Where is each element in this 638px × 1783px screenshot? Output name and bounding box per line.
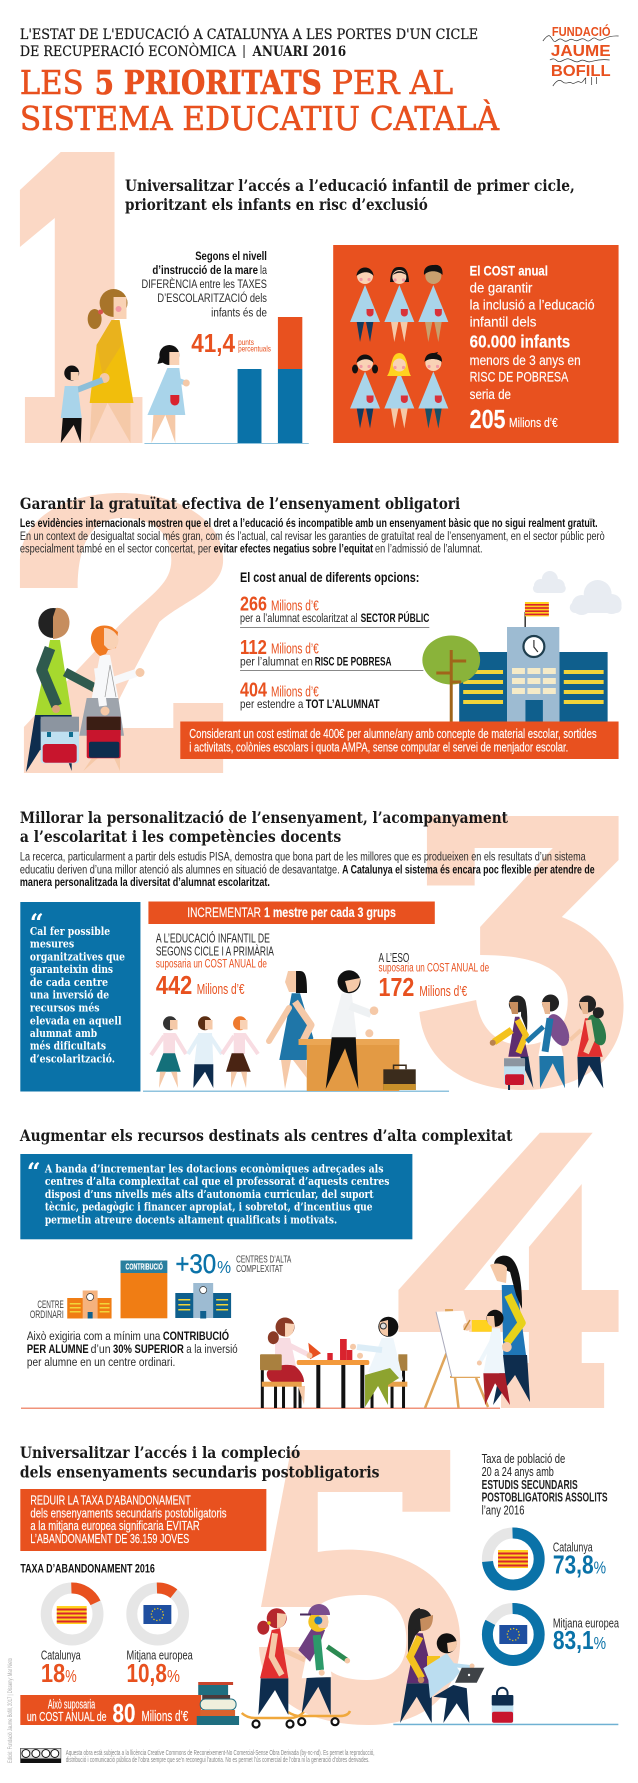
illustration: mother and children bbox=[61, 289, 190, 443]
banner: one teacher per three groups: 1 mestre per cada 3 grups bbox=[264, 904, 396, 920]
callout: 80 million cost: un COST ANUAL de bbox=[27, 1709, 107, 1724]
title: LES bbox=[20, 63, 84, 102]
girl on chair bbox=[260, 1318, 313, 1408]
text: population rate heading: Taxa de població de bbox=[482, 1451, 565, 1466]
heading: priority 3: Millorar la personalització de l’ensenyament, l’acompanyament bbox=[20, 808, 509, 827]
male teacher bbox=[326, 970, 378, 1089]
icon: red backpack bbox=[87, 717, 121, 758]
easel bbox=[425, 1309, 488, 1408]
teacher and child at easel bbox=[463, 1256, 530, 1405]
cost options list: 404 bbox=[240, 679, 267, 702]
cost options list bbox=[240, 569, 430, 711]
female teacher bbox=[269, 971, 313, 1089]
text: maternal education gap: infants és de bbox=[211, 305, 267, 320]
donut: Europe attainment 83.1%: 83,1 bbox=[553, 1627, 594, 1655]
panel: quote on resources: garanteixin dins bbox=[30, 962, 113, 976]
licence note: distribució i comunicació pública de l’obra sempre que se’n reconegui l’autoria. No es permet l’ús comercial de l’obra ni la generació d’obres derivades. bbox=[66, 1757, 370, 1764]
panel: cost of inclusion: seria de bbox=[470, 386, 511, 402]
heading: priority 5 bbox=[20, 1443, 380, 1482]
cost options list: per estendre a bbox=[240, 697, 304, 711]
text: priority 2 intro: evitar efectes negatius sobre l’equitat bbox=[214, 541, 373, 556]
callout: reduce dropout bbox=[20, 1489, 266, 1551]
panel: cost of inclusion: El COST anual bbox=[470, 262, 548, 279]
heading: priority 1: Universalitzar l’accés a l’educació infantil de primer cicle, bbox=[125, 176, 575, 195]
text: priority 3 intro: educatiu deriven d’una millor atenció als alumnes en situació de desavantatge. bbox=[20, 862, 340, 877]
icon: stack of books bbox=[197, 1682, 239, 1725]
cost options list: per a l’alumnat escolaritzat al bbox=[240, 611, 358, 625]
big number 3 bbox=[419, 816, 624, 1090]
stat: secondary: suposaria un COST ANUAL de bbox=[379, 960, 489, 975]
illustration: students with laptop bbox=[393, 1608, 618, 1725]
title: 5 PRIORITATS bbox=[95, 63, 322, 102]
panel: quote on resources bbox=[20, 902, 140, 1092]
text: maternal education gap: percentuals bbox=[238, 344, 271, 354]
stat: secondary: Milions d’€ bbox=[419, 983, 468, 1000]
banner: one teacher per three groups bbox=[148, 902, 435, 924]
stat: infant and primary: suposaria un COST ANUAL de bbox=[156, 956, 267, 971]
panel: cost of inclusion: 60.000 infants bbox=[470, 331, 570, 352]
title: PER AL bbox=[332, 63, 453, 102]
stat: infant and primary: A L’EDUCACIÓ INFANTIL DE bbox=[156, 930, 270, 946]
heading: priority 3 bbox=[20, 808, 509, 846]
desk bbox=[299, 1039, 399, 1091]
callout: reduce dropout: a la mitjana europea significaria EVITAR bbox=[30, 1518, 200, 1533]
text: priority 2 intro: en l’admissió de l’alumnat. bbox=[375, 541, 483, 556]
text: minimum contribution: Això exigiria com a mínim una bbox=[27, 1329, 161, 1343]
text: population rate heading: l’any 2016 bbox=[482, 1502, 524, 1518]
text: maternal education gap: D’ESCOLARITZACIÓ dels bbox=[157, 290, 267, 305]
text: minimum contribution: CONTRIBUCIÓ bbox=[163, 1328, 229, 1343]
cost options list: Milions d’€ bbox=[271, 597, 319, 615]
table and blocks bbox=[297, 1339, 369, 1408]
panel: cost of inclusion: infantil dels bbox=[470, 313, 536, 330]
callout: 80 million cost: Milions d’€ bbox=[141, 1708, 189, 1725]
logo: Fundació Jaume Bofill bbox=[543, 24, 619, 86]
big number 1 bbox=[20, 152, 142, 443]
panel: quote on resources: de cada centre bbox=[30, 975, 108, 989]
panel: quote on autonomy: permetin atreure docents altament qualificats i motivats. bbox=[45, 1212, 337, 1227]
title: SISTEMA EDUCATIU CATALÀ bbox=[20, 98, 500, 138]
illustration: parent and child with backpacks bbox=[26, 608, 145, 772]
donut: Europe attainment 83.1%: % bbox=[594, 1633, 606, 1653]
stat: secondary: 172 bbox=[379, 974, 414, 1002]
text: population rate heading: 20 a 24 anys amb bbox=[482, 1464, 554, 1479]
big number 2 bbox=[20, 493, 223, 773]
panel: cost of inclusion bbox=[333, 245, 619, 443]
callout: reduce dropout: REDUIR LA TAXA D’ABANDONAMENT bbox=[30, 1492, 191, 1508]
children in a row bbox=[151, 1016, 258, 1088]
panel: quote on resources: d’escolarització. bbox=[30, 1051, 115, 1066]
text: minimum contribution: a la inversió bbox=[186, 1342, 238, 1356]
panel: cost of inclusion: menors de 3 anys en bbox=[470, 352, 581, 368]
icons: six children bbox=[350, 265, 448, 428]
donut: Catalunya attainment 73.8%: % bbox=[594, 1557, 606, 1578]
girl on skateboard bbox=[257, 1608, 305, 1715]
text: minimum contribution: per alumne en un centre ordinari. bbox=[27, 1355, 175, 1369]
panel: quote on resources: alumnat amb bbox=[30, 1026, 97, 1040]
panel: quote on autonomy: centres d’alta complexitat cal que el professorat d’aquests centres bbox=[45, 1174, 389, 1188]
big number 4 bbox=[398, 1133, 619, 1408]
illustration: teachers and children bbox=[143, 970, 449, 1092]
panel: quote on autonomy: tècnic, pedagògic i financer apropiat, i sobretot, d’incentius que bbox=[45, 1199, 373, 1214]
teen with yellow sleeves bbox=[490, 996, 533, 1090]
logo: Fundació Jaume Bofill: BOFILL bbox=[551, 63, 611, 80]
text: minimum contribution: PER ALUMNE bbox=[27, 1342, 89, 1356]
cost options list: RISC DE POBRESA bbox=[315, 654, 392, 669]
chart: +30% contribution: CENTRE bbox=[37, 1299, 64, 1311]
donut: Catalunya dropout 18%: 18 bbox=[41, 1660, 65, 1688]
cost options list: SECTOR PÚBLIC bbox=[361, 610, 430, 625]
cost options list: per l’alumnat en bbox=[240, 654, 313, 669]
illustration: three teenagers bbox=[490, 994, 610, 1090]
illustration: classroom activity bbox=[21, 1256, 530, 1409]
chart: +30% contribution: CENTRES D’ALTA bbox=[236, 1254, 292, 1266]
icon: backpack bbox=[492, 1688, 513, 1723]
panel: quote on resources: organitzatives que bbox=[30, 949, 125, 964]
cost options list: Milions d’€ bbox=[271, 683, 319, 701]
icon: briefcase bbox=[383, 1065, 416, 1090]
donut: Europe dropout 10.8%: 10,8 bbox=[127, 1660, 167, 1688]
donut: Catalunya attainment 73.8%: 73,8 bbox=[553, 1551, 594, 1580]
stat: infant and primary: Milions d’€ bbox=[197, 981, 245, 998]
text: priority 2 intro bbox=[20, 516, 605, 556]
panel: quote on resources: més dificultats bbox=[30, 1038, 106, 1053]
panel: quote on autonomy: A banda d’incrementar les dotacions econòmiques adreçades als bbox=[44, 1161, 383, 1176]
chart: +30% contribution: COMPLEXITAT bbox=[236, 1264, 283, 1275]
cost options list: 112 bbox=[240, 637, 267, 659]
logo: Fundació Jaume Bofill: FUNDACIÓ bbox=[552, 24, 611, 39]
text: minimum contribution: 30% SUPERIOR bbox=[113, 1342, 184, 1356]
stat: secondary bbox=[379, 950, 489, 1002]
callout: 80 million cost: Això suposaria bbox=[48, 1696, 96, 1712]
text: minimum contribution bbox=[27, 1328, 238, 1369]
text: maternal education gap: DIFERÈNCIA entre les TAXES bbox=[141, 276, 267, 291]
panel: cost of inclusion: RISC DE POBRESA bbox=[470, 368, 569, 385]
cost options list: Milions d’€ bbox=[271, 640, 319, 658]
chart: +30% contribution bbox=[30, 1249, 292, 1321]
text: priority 3 intro bbox=[20, 849, 595, 889]
text: maternal education gap: punts bbox=[238, 338, 254, 347]
panel: cost of inclusion: de garantir bbox=[470, 279, 533, 296]
heading: priority 1: prioritzant els infants en risc d’exclusió bbox=[125, 195, 428, 214]
text: maternal education gap: Segons el nivell bbox=[195, 249, 267, 263]
donut: Catalunya dropout 18%: % bbox=[65, 1666, 77, 1686]
donut: Catalunya attainment 73.8% bbox=[487, 1533, 606, 1585]
chart: +30% contribution: CONTRIBUCIÓ bbox=[126, 1260, 163, 1272]
callout: 80 million cost bbox=[20, 1695, 201, 1728]
heading: priority 3: a l’escolaritat i les competències docents bbox=[20, 827, 341, 846]
boy on chair bbox=[350, 1317, 407, 1408]
callout: estimated cost bbox=[180, 722, 619, 759]
donut: Europe attainment 83.1% bbox=[487, 1608, 620, 1660]
donut: Europe dropout 10.8% bbox=[127, 1588, 193, 1688]
icon: ordinary school bbox=[67, 1290, 112, 1318]
donut: Catalunya attainment 73.8%: Catalunya bbox=[553, 1539, 593, 1555]
chart: +30% contribution: % bbox=[217, 1257, 231, 1277]
callout: reduce dropout: L’ABANDONAMENT DE 36.159 JOVES bbox=[30, 1531, 189, 1546]
text: maternal education gap: d’instrucció de la mare bbox=[152, 263, 258, 277]
panel: quote on autonomy: “ bbox=[27, 1158, 41, 1186]
illustration: skateboarders bbox=[242, 1604, 350, 1728]
donut: Catalunya dropout 18%: Catalunya bbox=[41, 1647, 81, 1663]
stat: infant and primary: 442 bbox=[156, 972, 192, 1000]
illustration: clouds bbox=[533, 571, 622, 615]
heading: priority 2: Garantir la gratuïtat efectiva de l’ensenyament obligatori bbox=[20, 494, 460, 513]
licence note: Aquesta obra està subjecta a la llicència Creative Commons de Reconeixement-No Comercial-Sense Obra Derivada (by-nc-nd). Es permet la reproducció, bbox=[66, 1750, 375, 1757]
teen with purple backpack bbox=[527, 994, 574, 1088]
boy with laptop bbox=[423, 1633, 484, 1723]
panel: quote on resources: “ bbox=[30, 909, 44, 937]
cost options list: El cost anual de diferents opcions: bbox=[240, 569, 419, 585]
donut: Europe dropout 10.8%: Mitjana europea bbox=[127, 1647, 193, 1663]
text: priority 3 intro: manera personalitzada la diversitat d’alumnat escolaritzat. bbox=[20, 875, 270, 889]
text: maternal education gap: la bbox=[260, 263, 267, 277]
big number 5 bbox=[259, 1450, 460, 1725]
chart: +30% contribution: ORDINARI bbox=[30, 1309, 64, 1321]
panel: quote on resources: elevada en aquell bbox=[30, 1013, 122, 1028]
heading: priority 5: Universalitzar l’accés i la compleció bbox=[20, 1443, 300, 1462]
stat: infant and primary bbox=[156, 930, 274, 1000]
cost options list: 266 bbox=[240, 593, 267, 616]
chart heading: dropout rate: TAXA D’ABANDONAMENT 2016 bbox=[20, 1561, 155, 1576]
icon: high complexity school bbox=[175, 1283, 231, 1318]
text: maternal education gap: 41,4 bbox=[191, 330, 236, 358]
heading: priority 5: dels ensenyaments secundaris postobligatoris bbox=[20, 1462, 380, 1482]
panel: quote on resources: mesures bbox=[30, 936, 74, 951]
donut: Catalunya dropout 18% bbox=[41, 1588, 98, 1688]
text: priority 2 intro: especialment també en el sector concertat, per bbox=[20, 541, 211, 556]
text: minimum contribution: d’un bbox=[91, 1342, 111, 1356]
bar chart: enrolment gap bbox=[144, 317, 309, 444]
text: maternal education gap bbox=[141, 249, 271, 358]
panel: quote on resources: recursos més bbox=[30, 1000, 100, 1015]
cost options list: TOT L’ALUMNAT bbox=[306, 697, 380, 711]
header subtitle: DE RECUPERACIÓ ECONÒMICA bbox=[20, 42, 237, 60]
panel: quote on resources: Cal fer possible bbox=[30, 924, 110, 938]
banner: one teacher per three groups: INCREMENTAR bbox=[187, 904, 261, 920]
callout: 80 million cost: 80 bbox=[113, 1700, 135, 1728]
panel: cost of inclusion: 205 bbox=[470, 406, 506, 434]
panel: cost of inclusion: la inclusió a l’educació bbox=[470, 296, 595, 313]
panel: cost of inclusion: Milions d’€ bbox=[509, 415, 558, 430]
header subtitle: L'ESTAT DE L'EDUCACIÓ A CATALUNYA A LES PORTES D'UN CICLE bbox=[20, 25, 478, 43]
credit line: Edició: Fundació Jaume Bofill, 2017 | Disseny: Mar Nieto bbox=[8, 1658, 14, 1763]
panel: quote on resources: una inversió de bbox=[30, 987, 109, 1002]
donut: Europe dropout 10.8%: % bbox=[167, 1666, 180, 1686]
chart: +30% contribution: +30 bbox=[175, 1249, 216, 1279]
icon: blue backpack bbox=[41, 717, 79, 763]
icon: creative commons badge bbox=[20, 1748, 61, 1763]
logo: Fundació Jaume Bofill: JAUME bbox=[551, 43, 611, 60]
panel: quote on autonomy: disposi d’uns nivells més alts d’autonomia curricular, del suport bbox=[45, 1187, 374, 1201]
header subtitle bbox=[20, 25, 478, 60]
text: population rate heading: ESTUDIS SECUNDARIS bbox=[482, 1477, 578, 1492]
heading: priority 4: Augmentar els recursos destinats als centres d’alta complexitat bbox=[19, 1126, 513, 1145]
stat: infant and primary: SEGONS CICLE I A PRIMÀRIA bbox=[156, 943, 274, 959]
teen with green backpack bbox=[570, 996, 610, 1088]
girl standing bbox=[400, 1608, 440, 1723]
stat: secondary: A L’ESO bbox=[379, 950, 409, 965]
title bbox=[20, 63, 500, 138]
licence note bbox=[66, 1750, 375, 1764]
heading: priority 1 bbox=[125, 176, 575, 214]
text: population rate heading bbox=[482, 1451, 608, 1518]
illustration: school, tree and flag bbox=[422, 602, 608, 722]
panel: quote on autonomy bbox=[20, 1154, 412, 1239]
boy on skateboard bbox=[298, 1604, 350, 1715]
header subtitle: ANUARI 2016 bbox=[252, 44, 346, 60]
callout: reduce dropout: dels ensenyaments secundaris postobligatoris bbox=[30, 1505, 227, 1521]
